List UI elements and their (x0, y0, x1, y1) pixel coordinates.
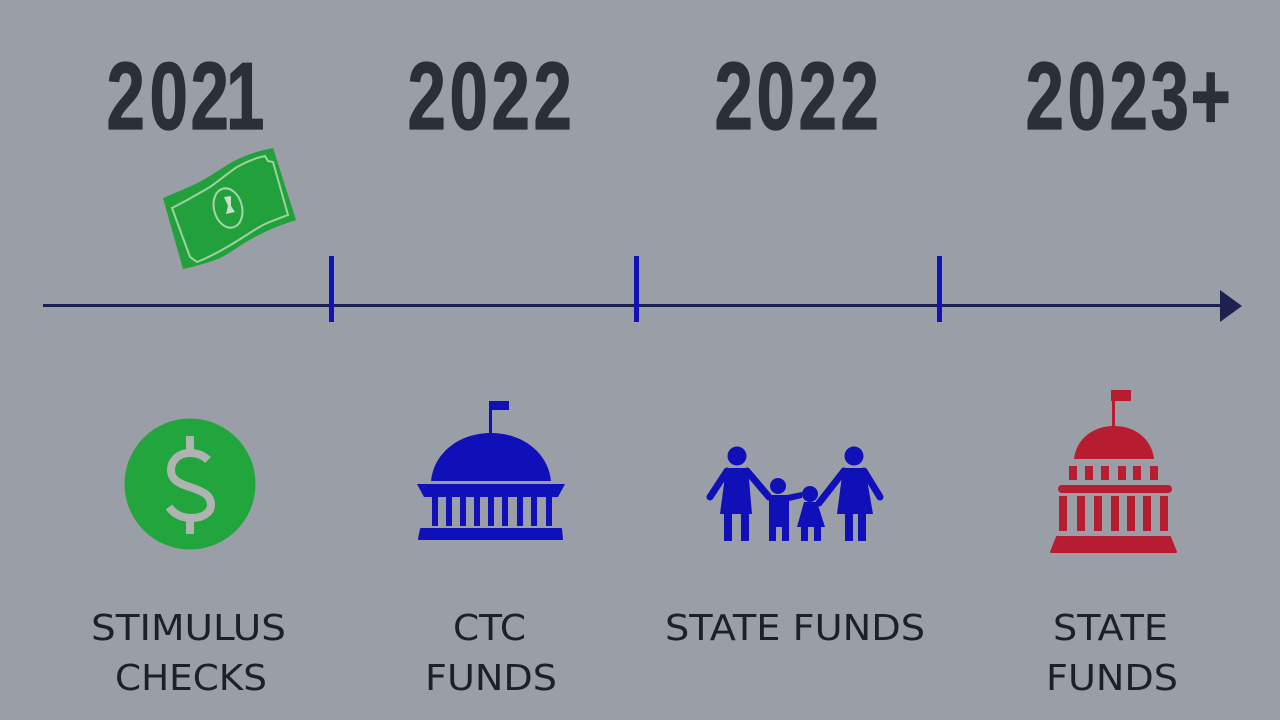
label: state funds single line: STATE FUNDS (665, 608, 925, 649)
icon: dollar bill (163, 148, 296, 269)
timeline tick 3 (937, 256, 942, 322)
icon: blue capitol (417, 401, 565, 539)
label: state funds two lines (1046, 608, 1178, 699)
label: ctc funds: CTC (453, 608, 526, 649)
timeline tick 1 (329, 256, 334, 322)
label: ctc funds (425, 608, 557, 699)
timeline tick 2 (634, 256, 639, 322)
icon: red capitol (1051, 390, 1176, 552)
icon: green dollar coin (124, 418, 256, 550)
year heading: 2023+: 2023+ (1025, 42, 1231, 150)
year heading: 2022 first: 2022 (408, 42, 572, 150)
label: stimulus checks: STIMULUS (91, 608, 286, 649)
label: state funds two lines: FUNDS (1046, 658, 1178, 699)
label: state funds two lines: STATE (1053, 608, 1168, 649)
label: stimulus checks: CHECKS (115, 658, 267, 699)
label: stimulus checks (91, 608, 286, 699)
year heading: 2021: 2021 (106, 42, 264, 150)
label: ctc funds: FUNDS (425, 658, 557, 699)
year heading: 2022 second: 2022 (715, 42, 879, 150)
timeline axis with arrow (43, 290, 1242, 322)
icon: blue family (710, 446, 880, 541)
